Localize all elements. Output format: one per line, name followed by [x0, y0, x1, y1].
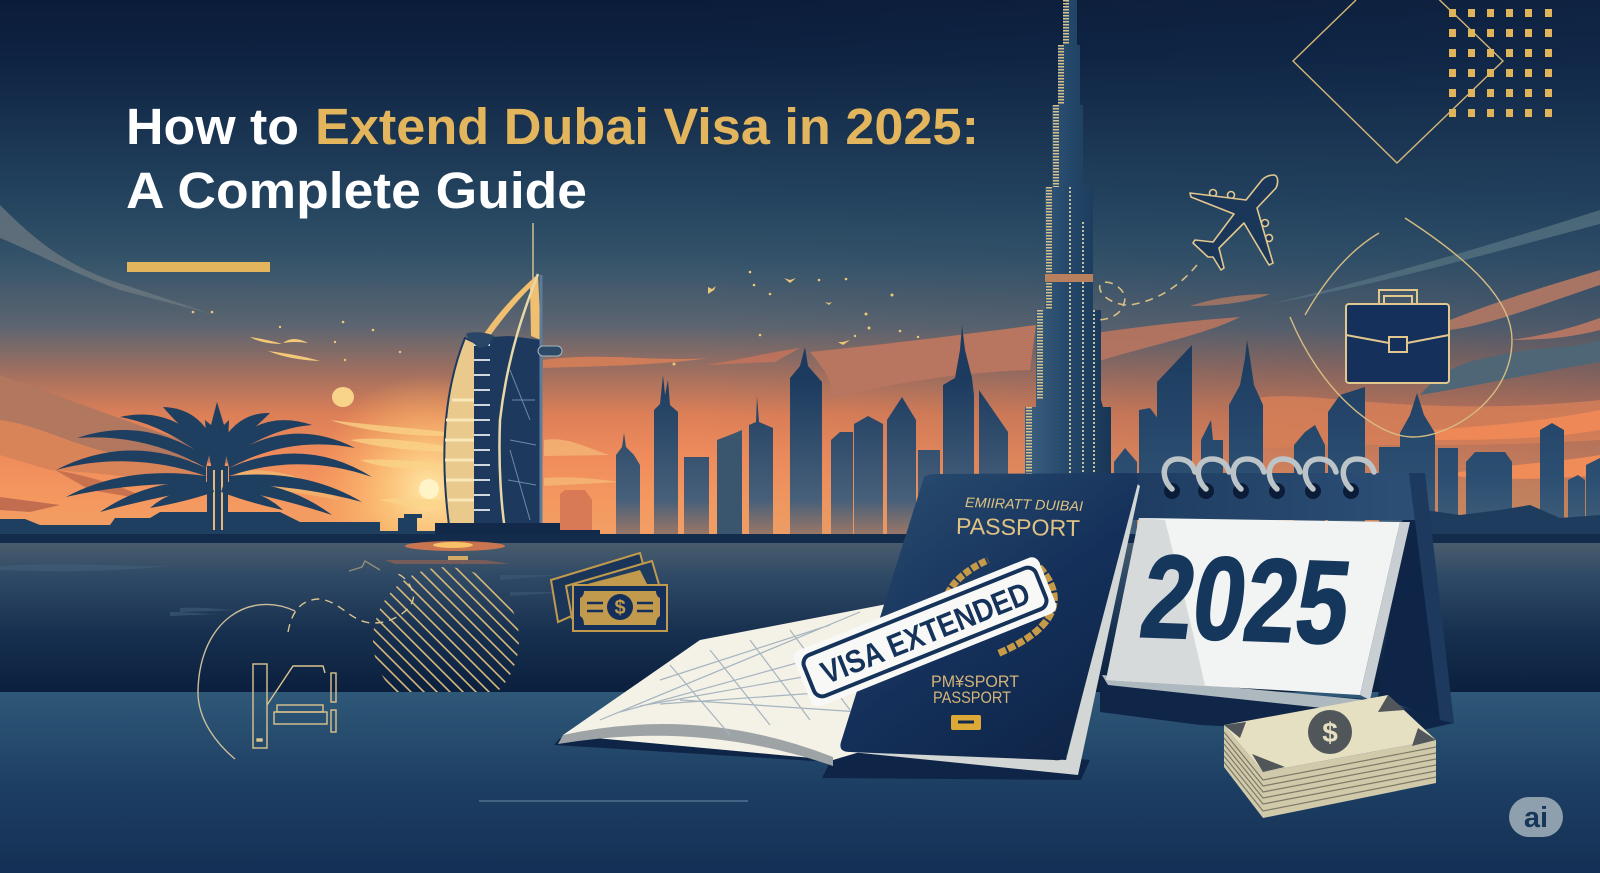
- decorative diamond outline: [1293, 0, 1503, 163]
- passport pages edge: [851, 483, 1140, 775]
- title: How to: [126, 98, 299, 155]
- passport: PASSPORT: [933, 688, 1011, 707]
- Burj Khalifa tower: [1025, 0, 1111, 540]
- calendar rings: [1164, 459, 1374, 499]
- title: Extend Dubai Visa in 2025:: [315, 98, 979, 155]
- clouds left: [0, 205, 800, 512]
- icon: cash notes small: $: [614, 597, 626, 619]
- skyline right of Burj Khalifa: [1114, 340, 1600, 540]
- icon: cash notes small: [551, 553, 667, 631]
- clouds right: [810, 210, 1600, 479]
- divider line: [479, 800, 748, 802]
- sun and moon: [332, 387, 439, 499]
- water: [0, 541, 1600, 693]
- Burj Al Arab hotel: [435, 223, 600, 540]
- passport: PASSPORT: [956, 513, 1080, 541]
- palm tree and low island buildings: [0, 402, 435, 540]
- line art document icon: [253, 664, 336, 748]
- title: A Complete Guide: [126, 162, 587, 219]
- title underline accent: [127, 262, 270, 272]
- open book with grid pages: [554, 604, 1090, 780]
- ai badge: ai: [1524, 802, 1548, 834]
- sky background: [0, 0, 1600, 545]
- briefcase icon with circle arcs: [1290, 218, 1512, 437]
- shoreline strip: [0, 534, 1600, 543]
- icon: dollar bill stack: [1224, 695, 1436, 818]
- passport laurel emblem: [945, 560, 1054, 654]
- passport cover text: EMIIRATT DUIBAI: [965, 494, 1083, 514]
- passport: [840, 473, 1140, 775]
- decorative dot grid: [1449, 9, 1552, 117]
- title: [126, 98, 979, 219]
- table surface: [0, 692, 1600, 873]
- calendar back stand: [1378, 473, 1454, 723]
- icon: airplane: [1190, 175, 1278, 270]
- dashed looping path and arc decoration: [198, 561, 414, 759]
- ai badge: [1509, 797, 1563, 837]
- passport lower text: PM¥SPORT: [931, 672, 1019, 691]
- calendar pages: [1102, 675, 1366, 712]
- striped circle decoration: [373, 567, 519, 692]
- skyline left of Burj Khalifa: [560, 325, 1008, 540]
- calendar 2025: [1100, 459, 1454, 735]
- birds and specks: [192, 271, 919, 366]
- passport chip: [951, 715, 981, 730]
- calendar year: 2025: [1134, 531, 1358, 669]
- visa extended stamp: VISA EXTENDED: [816, 575, 1035, 691]
- flight path dashes: [1096, 265, 1197, 320]
- icon: dollar bill stack: $: [1322, 717, 1338, 748]
